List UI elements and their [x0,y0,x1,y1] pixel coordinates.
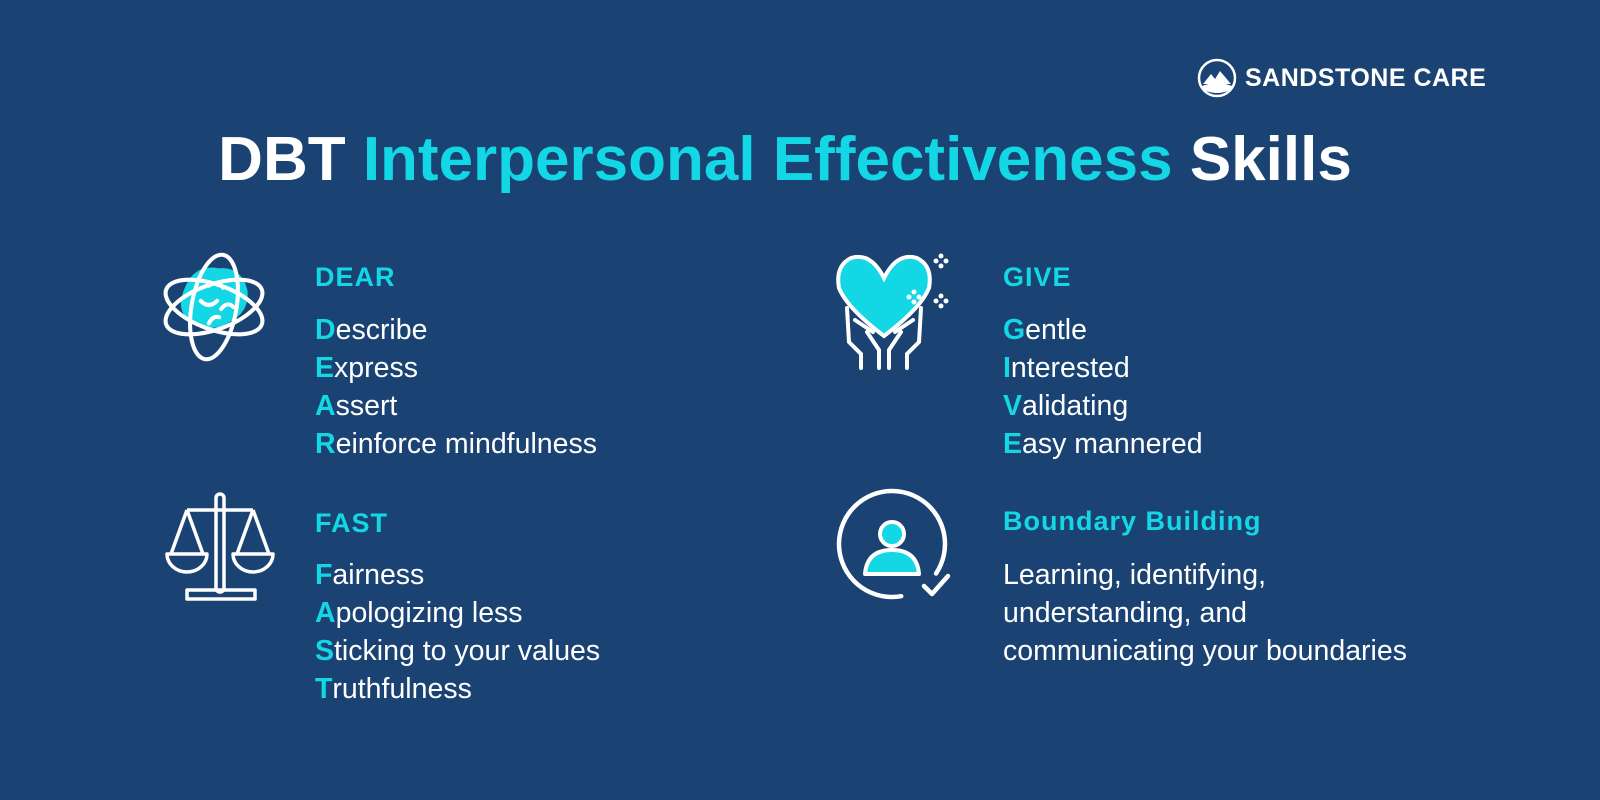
panel: FAST: Truthfulness [315,673,472,705]
panel: FAST: Fairness [315,559,424,591]
icon: brain atom [164,252,264,362]
panel: DEAR [164,252,597,460]
panel: DEAR: Express [315,352,418,384]
panel: Boundary Building: communicating your boundaries [1003,635,1407,667]
panel: GIVE: Validating [1003,390,1128,422]
panel: FAST: Sticking to your values [315,635,600,667]
icon: scales [165,492,275,601]
icon: heart in hands [836,254,948,370]
panel: GIVE [836,254,1203,460]
icon: logo mountain [1198,58,1236,98]
panel: Boundary Building [836,488,1407,667]
panel: GIVE: Easy mannered [1003,428,1203,460]
panel: Boundary Building: understanding, and [1003,597,1247,629]
panel: FAST: FAST [315,508,388,538]
panel: DEAR: Assert [315,390,397,422]
panel: GIVE: Interested [1003,352,1130,384]
panel: FAST: Apologizing less [315,597,523,629]
panel: Boundary Building: Learning, identifying, [1003,559,1266,591]
icon: person in circle with check [836,488,950,600]
panel: DEAR: Reinforce mindfulness [315,428,597,460]
logo: SANDSTONE CARE [1245,64,1486,92]
title: DBT Interpersonal Effectiveness Skills [218,125,1352,194]
panel: GIVE: Gentle [1003,314,1087,346]
panel: FAST [165,492,600,705]
panel: Boundary Building: Boundary Building [1003,506,1261,536]
panel: DEAR: DEAR [315,262,396,292]
panel: GIVE: GIVE [1003,262,1072,292]
logo [1198,58,1486,98]
panel: DEAR: Describe [315,314,427,346]
